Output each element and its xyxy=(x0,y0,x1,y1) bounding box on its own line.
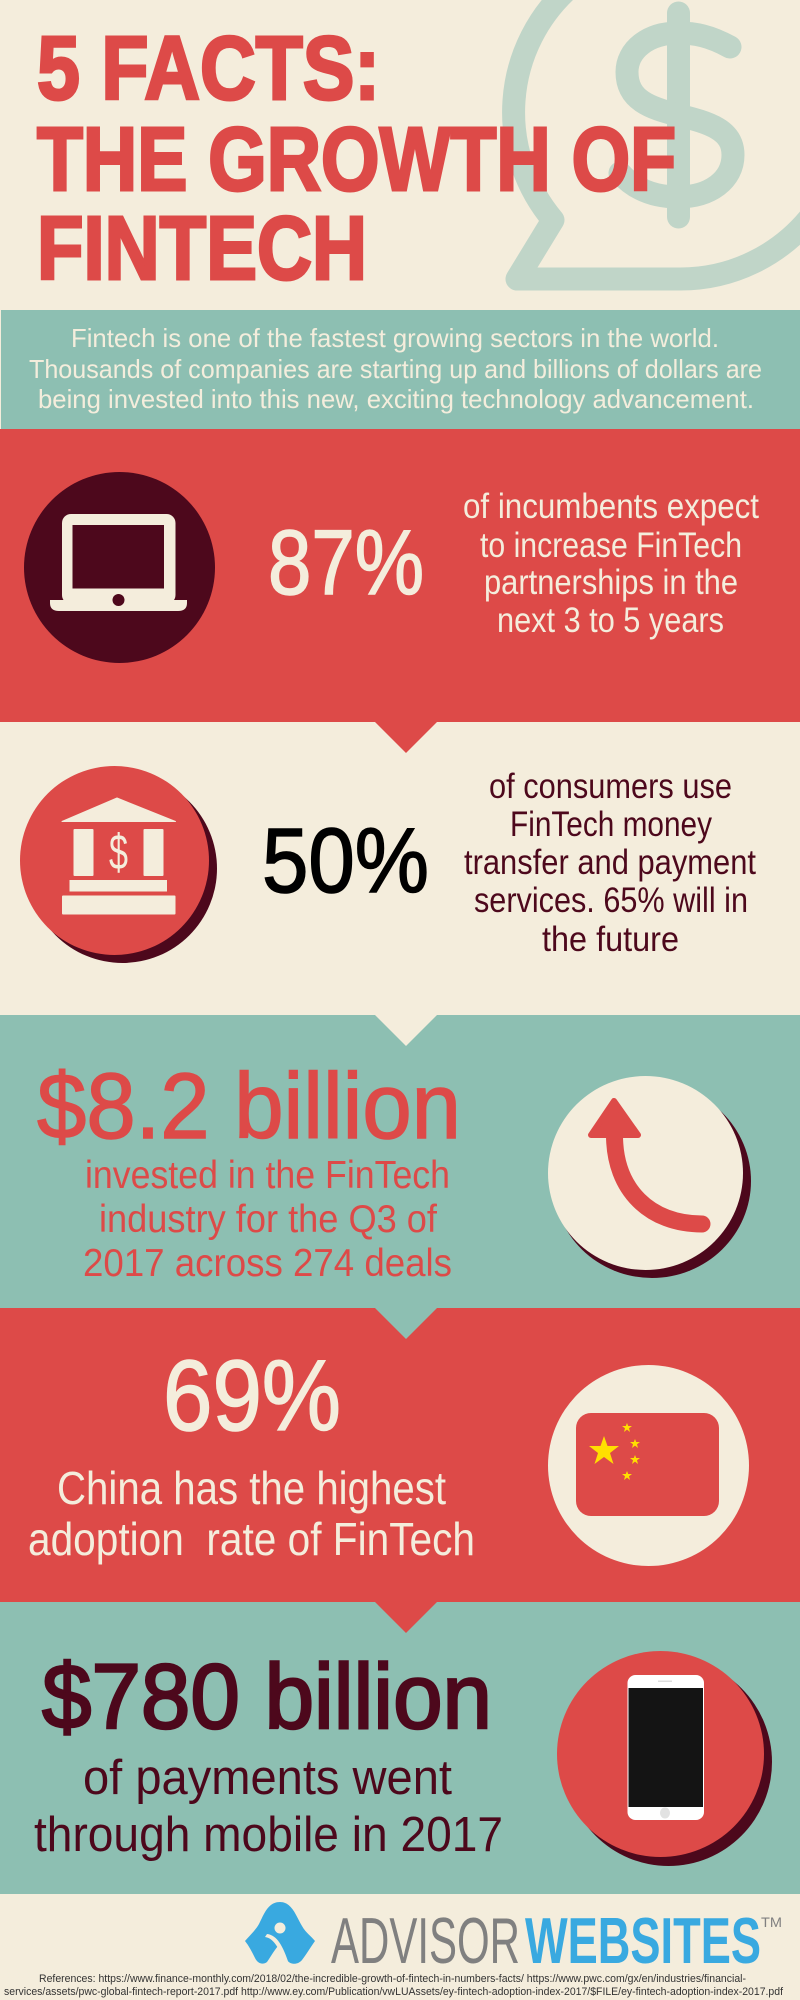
text: fact 3 description: invested in the FinTech xyxy=(85,1154,450,1197)
intro text xyxy=(29,323,762,414)
text: fact 4 description: adoption rate of FinTech xyxy=(28,1513,475,1565)
title: FINTECH xyxy=(37,199,367,299)
arrow: red pointer into fact 5 xyxy=(375,1602,437,1633)
text: fact 1 description: of incumbents expect xyxy=(463,487,759,526)
logo: Advisor Websites: TM xyxy=(761,1914,782,1930)
icon: bank xyxy=(20,766,217,963)
icon: bank: $ xyxy=(109,824,128,880)
arrow: teal pointer into fact 4 xyxy=(375,1308,437,1339)
text: fact 5 description: of payments went xyxy=(83,1751,452,1805)
icon: smartphone xyxy=(557,1651,772,1866)
text: fact 2 description: transfer and payment xyxy=(464,843,756,882)
stat: $780 billion: $780 billion xyxy=(42,1646,492,1748)
text: fact 5 description xyxy=(34,1751,503,1862)
text: fact 1 description: next 3 to 5 years xyxy=(497,601,724,640)
panel: fact 2 background xyxy=(0,722,800,1015)
icon: curved up arrow xyxy=(548,1076,751,1278)
icon: China flag xyxy=(548,1365,749,1566)
text: fact 1 description: partnerships in the xyxy=(484,563,738,602)
text: references: services/assets/pwc-global-fintech-report-2017.pdf http://www.ey.com/Publication/vwLUAssets/ey-fintech-adoption-index-2017/$FILE/ey-fintech-adoption-index-2017.pdf xyxy=(4,1986,784,1998)
arrow: cream pointer into fact 3 xyxy=(375,1015,437,1046)
intro text: Thousands of companies are starting up and billions of dollars are xyxy=(29,354,762,384)
panel: introduction xyxy=(1,310,800,429)
text: fact 2 description: the future xyxy=(542,920,679,959)
text: fact 2 description: of consumers use xyxy=(489,767,732,806)
panel: footer background xyxy=(0,1894,800,2000)
stat: 50%: 50% xyxy=(262,810,429,912)
title: THE GROWTH OF xyxy=(37,110,676,210)
text: fact 2 description xyxy=(464,767,756,959)
text: fact 5 description: through mobile in 2017 xyxy=(34,1808,503,1862)
text: references: References: https://www.finance-monthly.com/2018/02/the-incredible-growth-of-fintech-in-numbers-facts/ https://www.pwc.com/gx/en/industries/financial- xyxy=(39,1973,746,1985)
icon: logo mark xyxy=(245,1902,315,1964)
text: fact 4 description: China has the highest xyxy=(57,1462,446,1514)
icon: laptop xyxy=(24,472,215,663)
icon: speech bubble with dollar sign xyxy=(514,0,800,279)
text: fact 1 description: to increase FinTech xyxy=(480,526,742,565)
intro text: Fintech is one of the fastest growing sectors in the world. xyxy=(71,323,719,353)
text: fact 4 description xyxy=(28,1462,475,1565)
panel: fact 1 background xyxy=(0,429,800,722)
logo: Advisor Websites: ADVISOR xyxy=(331,1904,520,1977)
text: fact 1 description xyxy=(463,487,759,640)
text: fact 2 description: services. 65% will in xyxy=(474,881,748,920)
panel: fact 4 background xyxy=(0,1308,800,1602)
panel: fact 5 background xyxy=(0,1602,800,1894)
title xyxy=(37,19,676,299)
stat: 69%: 69% xyxy=(163,1340,341,1452)
arrow: red pointer into fact 2 xyxy=(375,722,437,753)
text: references xyxy=(4,1973,784,1998)
title: 5 FACTS: xyxy=(37,19,380,119)
panel: fact 3 background xyxy=(0,1015,800,1308)
panel: header background xyxy=(0,0,800,310)
text: fact 3 description xyxy=(83,1154,452,1285)
text: fact 3 description: 2017 across 274 deals xyxy=(83,1242,452,1285)
intro text: being invested into this new, exciting technology advancement. xyxy=(38,384,754,414)
text: fact 3 description: industry for the Q3 of xyxy=(99,1198,437,1241)
logo: Advisor Websites xyxy=(245,1902,782,1977)
stat: $8.2 billion: $8.2 billion xyxy=(37,1054,461,1158)
stat: 87%: 87% xyxy=(268,512,424,614)
text: fact 2 description: FinTech money xyxy=(510,805,712,844)
